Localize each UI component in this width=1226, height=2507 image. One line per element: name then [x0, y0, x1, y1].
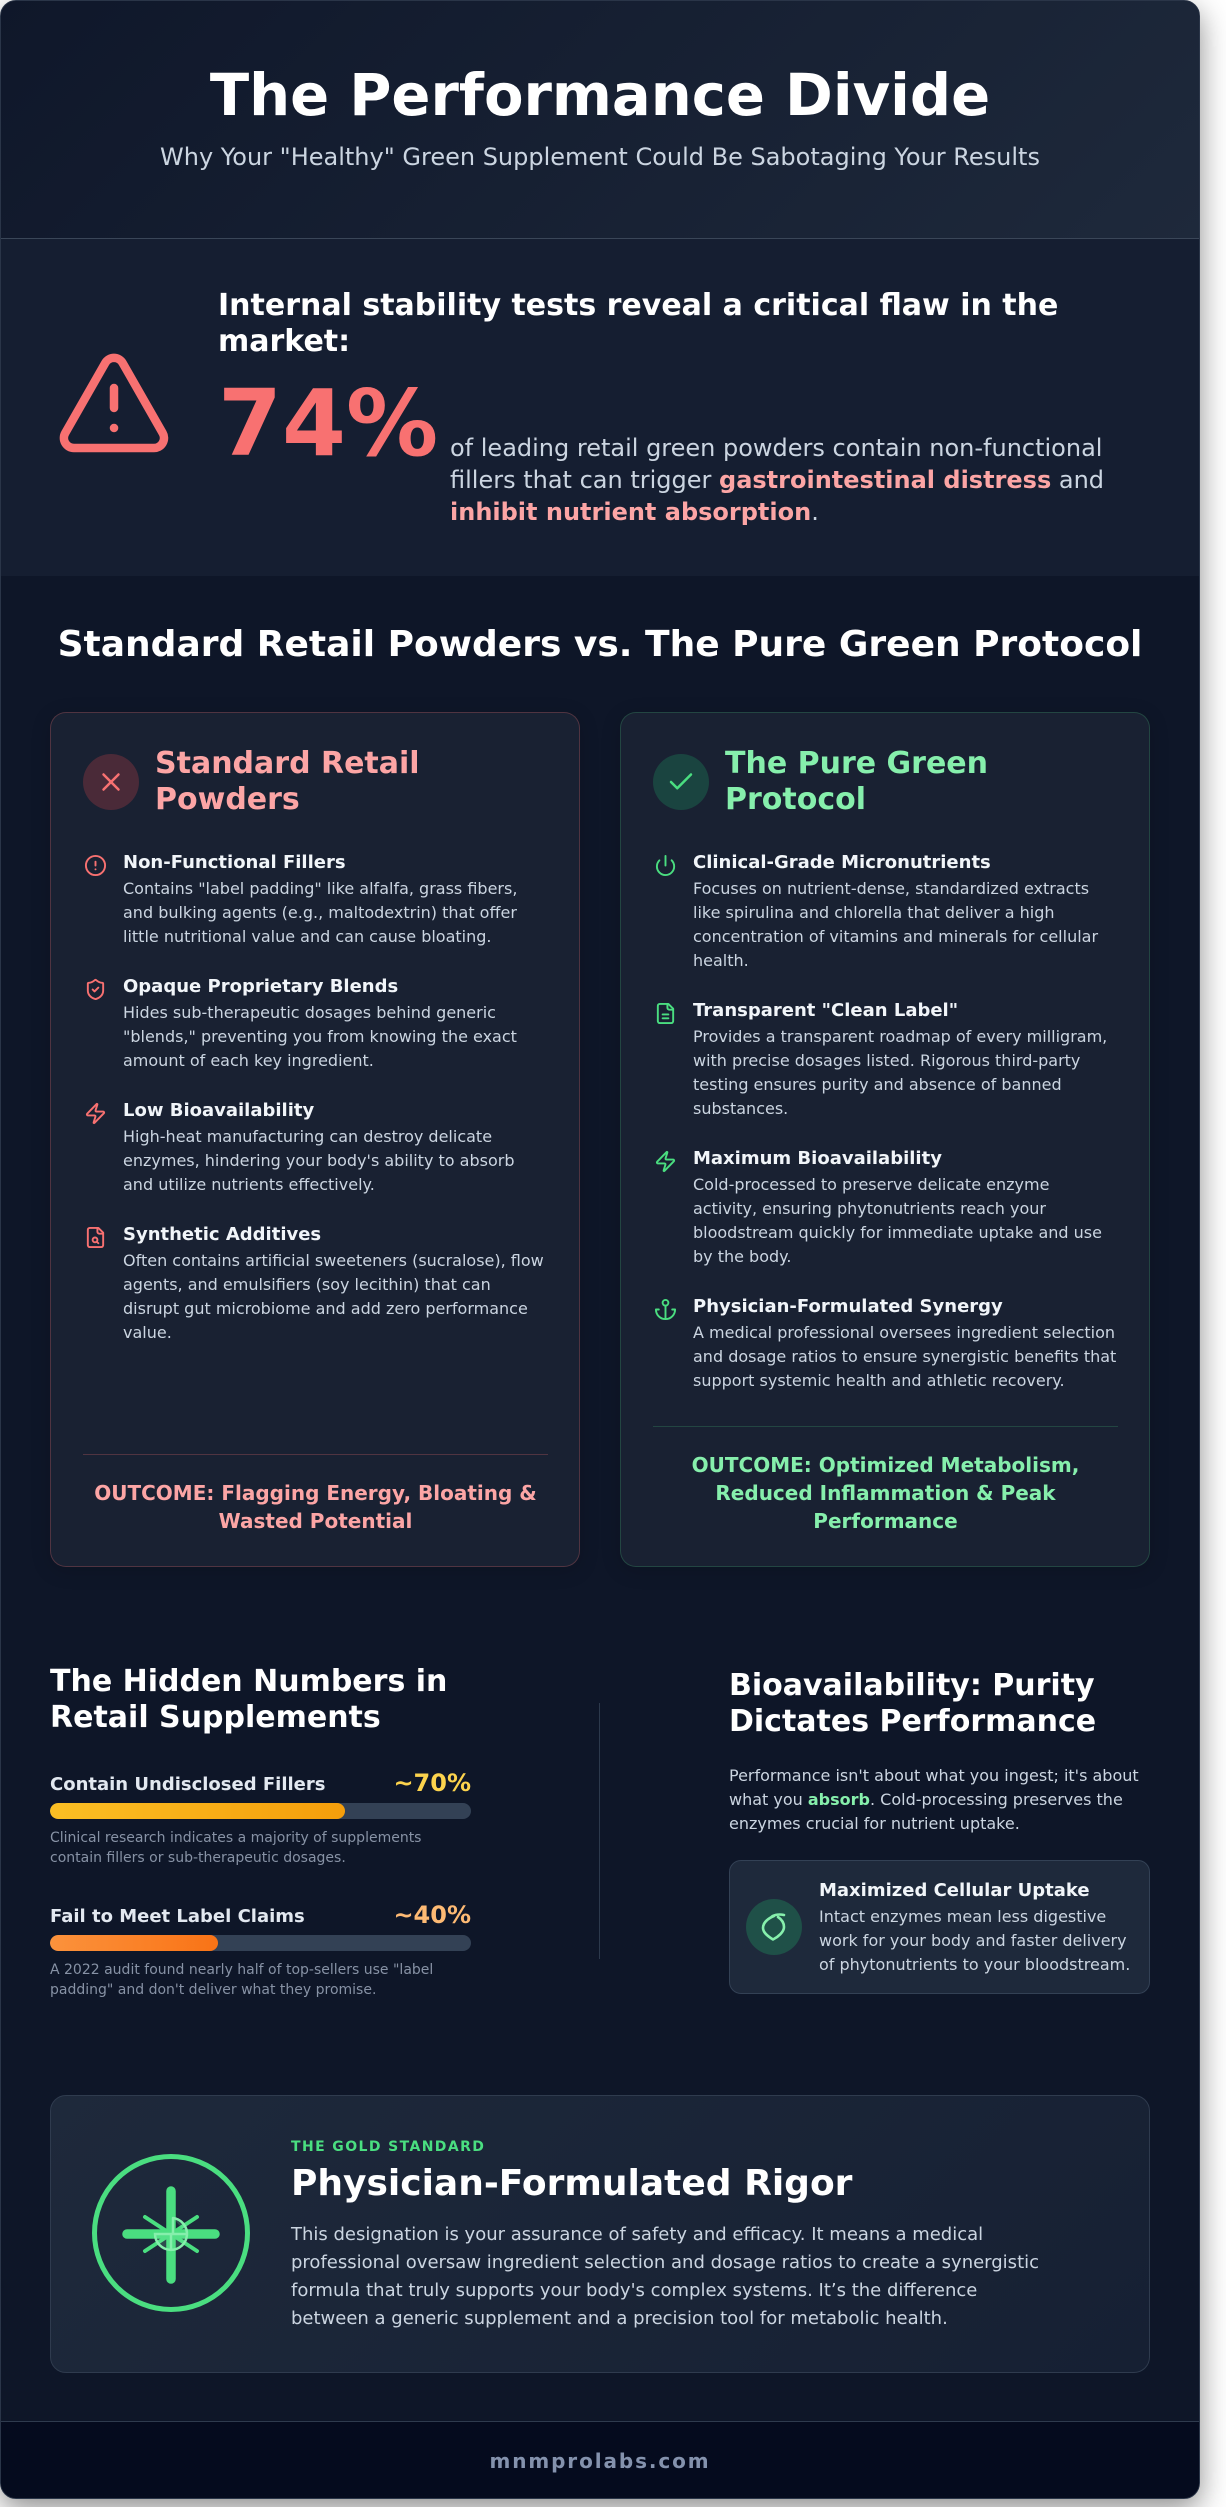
item: clinical-grade micronutrients [693, 852, 1098, 970]
heading: Retail Supplements [50, 1700, 381, 1735]
alert heading: market: [218, 324, 350, 359]
callout: cellular uptake [729, 1860, 1150, 1994]
outcome: Wasted Potential [219, 1509, 412, 1533]
item: opaque proprietary blends [123, 976, 517, 1070]
icon: warning triangle [60, 354, 168, 452]
item: clinical-grade micronutrients: Clinical-Grade Micronutrients [693, 852, 991, 873]
item: low bioavailability: High-heat manufacturing can destroy delicate [123, 1127, 492, 1146]
item: transparent clean label: substances. [693, 1099, 788, 1118]
item: physician-formulated synergy: Physician-Formulated Synergy [693, 1296, 1003, 1317]
paragraph: enzymes crucial for nutrient uptake. [729, 1814, 1020, 1833]
item: transparent clean label [693, 1000, 1107, 1118]
item: opaque proprietary blends: Hides sub-therapeutic dosages behind generic [123, 1003, 496, 1022]
outcome: OUTCOME: Flagging Energy, Bloating & [94, 1481, 537, 1505]
callout title: Maximized Cellular Uptake [819, 1880, 1090, 1901]
icon: file text [656, 1003, 674, 1024]
panel heading: Powders [155, 782, 300, 817]
item: physician-formulated synergy: and dosage ratios to ensure synergistic benefits that [693, 1347, 1116, 1366]
alert panel [0, 239, 1200, 576]
heading [50, 1664, 447, 1735]
site url: mnmprolabs.com [489, 2449, 711, 2473]
note: Clinical research indicates a majority of supplements [50, 1830, 421, 1846]
item: non-functional fillers: Contains "label padding" like alfalfa, grass fibers, [123, 879, 517, 898]
item: low bioavailability [123, 1100, 514, 1194]
icon: medical star in ring [92, 2154, 250, 2312]
heading: Physician-Formulated Rigor [291, 2163, 852, 2204]
item: physician-formulated synergy [693, 1296, 1116, 1390]
item: non-functional fillers: Non-Functional Fillers [123, 852, 346, 873]
icon: anchor [655, 1299, 676, 1320]
panel: pure green protocol [620, 712, 1150, 1567]
item: synthetic additives: value. [123, 1323, 172, 1342]
heading: Bioavailability: Purity [729, 1668, 1095, 1703]
item: non-functional fillers: little nutritional value and can cause bloating. [123, 927, 491, 946]
panel heading: The Pure Green [725, 746, 988, 781]
item: non-functional fillers: and bulking agents (e.g., maltodextrin) that offer [123, 903, 517, 922]
icon: uptake circle [746, 1899, 802, 1955]
item: low bioavailability: and utilize nutrients effectively. [123, 1175, 375, 1194]
alert description: of leading retail green powders contain non-functional [450, 434, 1102, 462]
item: opaque proprietary blends: Opaque Proprietary Blends [123, 976, 398, 997]
stat: label claims [50, 1901, 471, 1998]
panel heading: Standard Retail [155, 746, 420, 781]
item: physician-formulated synergy: support systemic health and athletic recovery. [693, 1371, 1065, 1390]
item: maximum bioavailability: activity, ensuring phytonutrients reach your [693, 1199, 1046, 1218]
callout text: Intact enzymes mean less digestive [819, 1907, 1106, 1926]
item: transparent clean label: testing ensures purity and absence of banned [693, 1075, 1062, 1094]
heading [729, 1668, 1096, 1739]
item: non-functional fillers [123, 852, 517, 946]
title: The Performance Divide [210, 62, 990, 129]
item: synthetic additives: agents, and emulsifiers (soy lecithin) that can [123, 1275, 491, 1294]
item: transparent clean label: Transparent "Clean Label" [693, 1000, 958, 1021]
callout text: work for your body and faster delivery [819, 1931, 1127, 1950]
icon: zap [86, 1102, 106, 1124]
item: low bioavailability: Low Bioavailability [123, 1100, 314, 1121]
panel: physician-formulated rigor [50, 2095, 1150, 2373]
callout text [819, 1907, 1130, 1974]
heading: Dictates Performance [729, 1704, 1096, 1739]
paragraph: Performance isn't about what you ingest; it's about [729, 1766, 1139, 1785]
panel heading: Protocol [725, 782, 866, 817]
heading: The Hidden Numbers in [50, 1664, 447, 1699]
item: synthetic additives: Often contains artificial sweeteners (sucralose), flow [123, 1251, 544, 1270]
panel: bioavailability [729, 1668, 1150, 1994]
panel: hidden numbers [50, 1664, 471, 1998]
item: clinical-grade micronutrients: health. [693, 951, 749, 970]
item: opaque proprietary blends: "blends," preventing you from knowing the exact [123, 1027, 517, 1046]
paragraph: This designation is your assurance of safety and efficacy. It means a medical [291, 2224, 983, 2245]
panel heading [725, 746, 988, 817]
stat: 74%: 74% [218, 370, 438, 477]
comparison heading: Standard Retail Powders vs. The Pure Green Protocol [58, 624, 1142, 665]
item: clinical-grade micronutrients: concentration of vitamins and minerals for cellular [693, 927, 1098, 946]
item: synthetic additives: disrupt gut microbiome and add zero performance [123, 1299, 528, 1318]
icon: file search [86, 1227, 104, 1248]
alert description: inhibit nutrient absorption. [450, 498, 819, 526]
item: physician-formulated synergy: A medical professional oversees ingredient selection [693, 1323, 1115, 1342]
item: maximum bioavailability: by the body. [693, 1247, 791, 1266]
paragraph: what you absorb. Cold-processing preserves the [729, 1790, 1123, 1809]
panel heading [155, 746, 420, 817]
item: maximum bioavailability: Maximum Bioavailability [693, 1148, 942, 1169]
icon: check in circle [653, 754, 709, 810]
footer [0, 2421, 1200, 2501]
value: ~70% [393, 1769, 471, 1797]
panel: standard retail powders [50, 712, 580, 1567]
outcome: Reduced Inflammation & Peak [715, 1481, 1056, 1505]
alert description: fillers that can trigger gastrointestinal distress and [450, 466, 1104, 494]
icon: zap [656, 1150, 676, 1172]
value: ~40% [393, 1901, 471, 1929]
header band [0, 0, 1200, 239]
outcome: OUTCOME: Optimized Metabolism, [692, 1453, 1079, 1477]
paragraph: formula that truly supports your body's complex systems. It’s the difference [291, 2280, 977, 2301]
subtitle: Why Your "Healthy" Green Supplement Could Be Sabotaging Your Results [160, 143, 1040, 171]
note [50, 1830, 421, 1866]
item: maximum bioavailability: bloodstream quickly for immediate uptake and use [693, 1223, 1102, 1242]
paragraph [729, 1766, 1139, 1833]
item: transparent clean label: Provides a transparent roadmap of every milligram, [693, 1027, 1107, 1046]
alert heading: Internal stability tests reveal a critical flaw in the [218, 288, 1058, 323]
note: contain fillers or sub-therapeutic dosages. [50, 1850, 346, 1866]
item: maximum bioavailability: Cold-processed to preserve delicate enzyme [693, 1175, 1049, 1194]
note: padding" and don't deliver what they promise. [50, 1982, 376, 1998]
item: synthetic additives [123, 1224, 544, 1342]
note: A 2022 audit found nearly half of top-sellers use "label [50, 1962, 433, 1978]
outcome [94, 1481, 537, 1533]
label: Contain Undisclosed Fillers [50, 1774, 325, 1795]
stat: undisclosed fillers [50, 1769, 471, 1866]
alert heading [218, 288, 1058, 359]
item: clinical-grade micronutrients: like spirulina and chlorella that deliver a high [693, 903, 1055, 922]
item: maximum bioavailability [693, 1148, 1102, 1266]
icon: power [656, 855, 676, 876]
item: synthetic additives: Synthetic Additives [123, 1224, 321, 1245]
item: low bioavailability: enzymes, hindering your body's ability to absorb [123, 1151, 514, 1170]
eyebrow: THE GOLD STANDARD [291, 2139, 485, 2155]
bar track and fill [50, 1803, 471, 1819]
paragraph: professional oversaw ingredient selection and dosage ratios to create a synergistic [291, 2252, 1039, 2273]
callout text: of phytonutrients to your bloodstream. [819, 1955, 1130, 1974]
item: opaque proprietary blends: amount of each key ingredient. [123, 1051, 374, 1070]
icon: shield check [86, 978, 104, 1000]
outcome [692, 1453, 1079, 1533]
icon: x in circle [83, 754, 139, 810]
paragraph: between a generic supplement and a precision tool for metabolic health. [291, 2308, 948, 2329]
note [50, 1962, 433, 1998]
outcome: Performance [813, 1509, 958, 1533]
item: clinical-grade micronutrients: Focuses on nutrient-dense, standardized extracts [693, 879, 1089, 898]
icon: alert circle [84, 855, 106, 876]
paragraph [290, 2224, 1039, 2329]
label: Fail to Meet Label Claims [50, 1906, 305, 1927]
bar track and fill [50, 1935, 471, 1951]
item: transparent clean label: with precise dosages listed. Rigorous third-party [693, 1051, 1080, 1070]
alert description [450, 434, 1104, 526]
